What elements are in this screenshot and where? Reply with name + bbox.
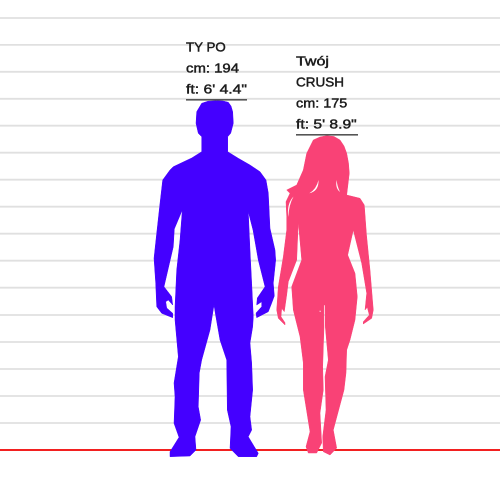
label: man: ft: 6' 4.4" [186, 81, 247, 96]
label: woman: CRUSH [296, 75, 344, 90]
hair highlights [288, 180, 340, 312]
label: man [186, 40, 247, 101]
silhouette: man [154, 101, 276, 457]
label: woman: ft: 5' 8.9" [296, 116, 357, 131]
silhouette: woman [277, 136, 373, 455]
label: woman: Twój [296, 54, 329, 69]
baseline: ground line [0, 449, 500, 451]
label: man: TY PO [186, 40, 226, 55]
label: man: cm: 194 [186, 61, 239, 76]
label: woman: cm: 175 [296, 95, 347, 110]
label: woman [296, 54, 358, 136]
